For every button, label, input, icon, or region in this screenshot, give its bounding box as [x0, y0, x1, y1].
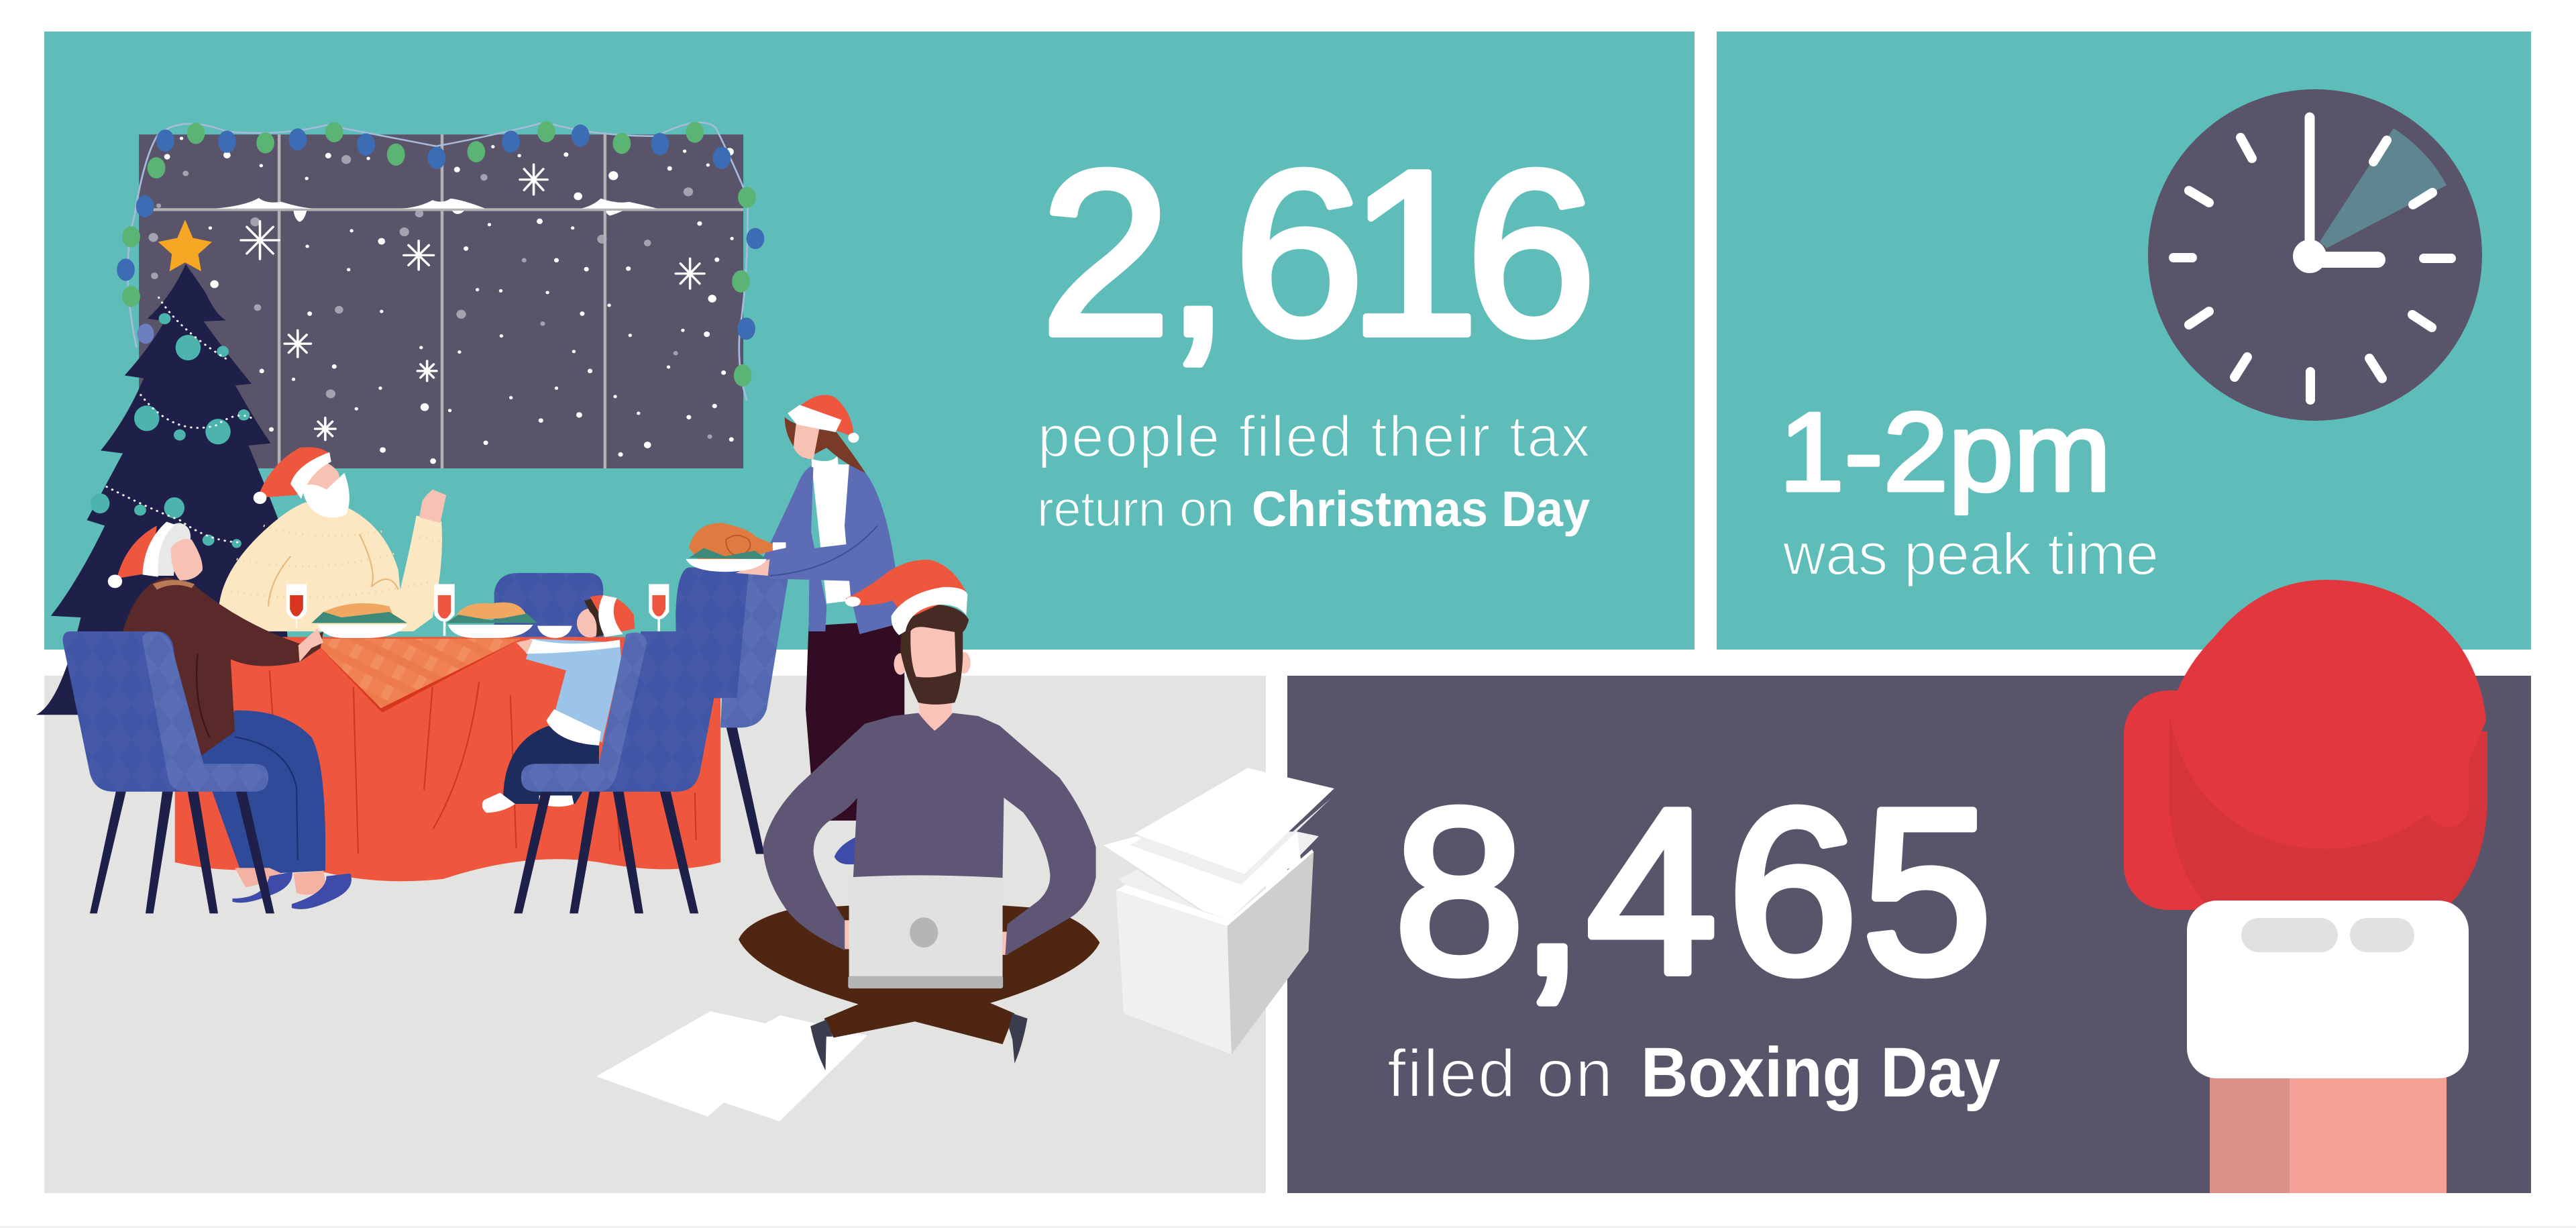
- shoes: [810, 1013, 1028, 1070]
- panel: peak time background: [1717, 32, 2531, 650]
- arm: [2290, 1074, 2447, 1193]
- glove top: [2169, 580, 2486, 849]
- purple jumper: [763, 713, 1096, 956]
- thumb: [2124, 690, 2258, 910]
- grandfather in cream sweater: [219, 447, 446, 631]
- wine glasses: [286, 584, 669, 636]
- bowl: [537, 626, 572, 638]
- panel: grey floor: [44, 676, 1266, 1193]
- laptop: [848, 874, 1003, 988]
- icon: red boxing glove: [2124, 580, 2487, 1193]
- child in blue jumper: [482, 595, 635, 813]
- text: filed on boxing day: filed on: [1387, 1036, 1613, 1111]
- plate of food right: [454, 603, 527, 620]
- woman serving turkey: [686, 395, 904, 864]
- hair: [785, 417, 865, 473]
- santa hat: [258, 447, 331, 498]
- text: return on christmas day: return on: [1037, 481, 1234, 537]
- right front chair: [514, 631, 724, 913]
- snow on ledge: [215, 198, 657, 209]
- right back chair: [676, 568, 790, 854]
- text: return on christmas day: Christmas Day: [1252, 481, 1590, 537]
- peak hour wedge: [2320, 128, 2447, 248]
- neck: [919, 701, 952, 731]
- text: people filed their tax: people filed their tax: [1038, 405, 1590, 469]
- grandmother in brown jacket: [108, 522, 352, 909]
- hands: [843, 920, 1008, 955]
- dishes and wine: [286, 584, 669, 638]
- headline: peak time: 1-2pm: [1779, 390, 2111, 515]
- glove shadow body: [2169, 711, 2487, 906]
- plate of food left: [317, 603, 395, 620]
- back centre chair: [494, 573, 603, 637]
- illustration: man filing return on laptop: [739, 560, 1099, 1070]
- bottom hairline: [0, 1226, 2576, 1228]
- hand raised: [419, 489, 446, 523]
- illustration: family christmas dinner: [36, 121, 904, 913]
- head: [150, 523, 191, 576]
- box of paperwork: [1104, 768, 1334, 1054]
- headline: boxing day count: 8,465: [1394, 760, 1992, 1023]
- headline: christmas day count: 2,616: [1040, 122, 1597, 385]
- cuff: [2187, 901, 2469, 1078]
- string of fairy lights: [117, 121, 764, 401]
- crossed legs: [739, 906, 1099, 1044]
- table with red cloth: [175, 637, 720, 881]
- man head: [894, 605, 971, 705]
- roast turkey on plate: [689, 523, 775, 559]
- santa hat: [800, 395, 853, 437]
- text: was peak time: was peak time: [1782, 521, 2159, 587]
- icon: gold star: [158, 219, 212, 271]
- text: filed on boxing day: Boxing Day: [1641, 1033, 2000, 1112]
- man santa hat: [845, 560, 967, 635]
- head and beard: [305, 459, 344, 498]
- icon: wall clock at 3 o'clock: [2148, 89, 2482, 421]
- santa hat: [117, 525, 157, 578]
- panel: christmas day background: [44, 32, 1695, 650]
- window frame: [153, 134, 743, 468]
- panel: boxing day background: [1287, 676, 2531, 1193]
- christmas tree: [36, 219, 288, 715]
- loose papers on floor: [596, 1011, 867, 1121]
- window with falling snow: [139, 134, 743, 468]
- plaid table runner: [311, 639, 521, 713]
- snowflakes: [241, 164, 704, 440]
- left chair: [63, 631, 274, 913]
